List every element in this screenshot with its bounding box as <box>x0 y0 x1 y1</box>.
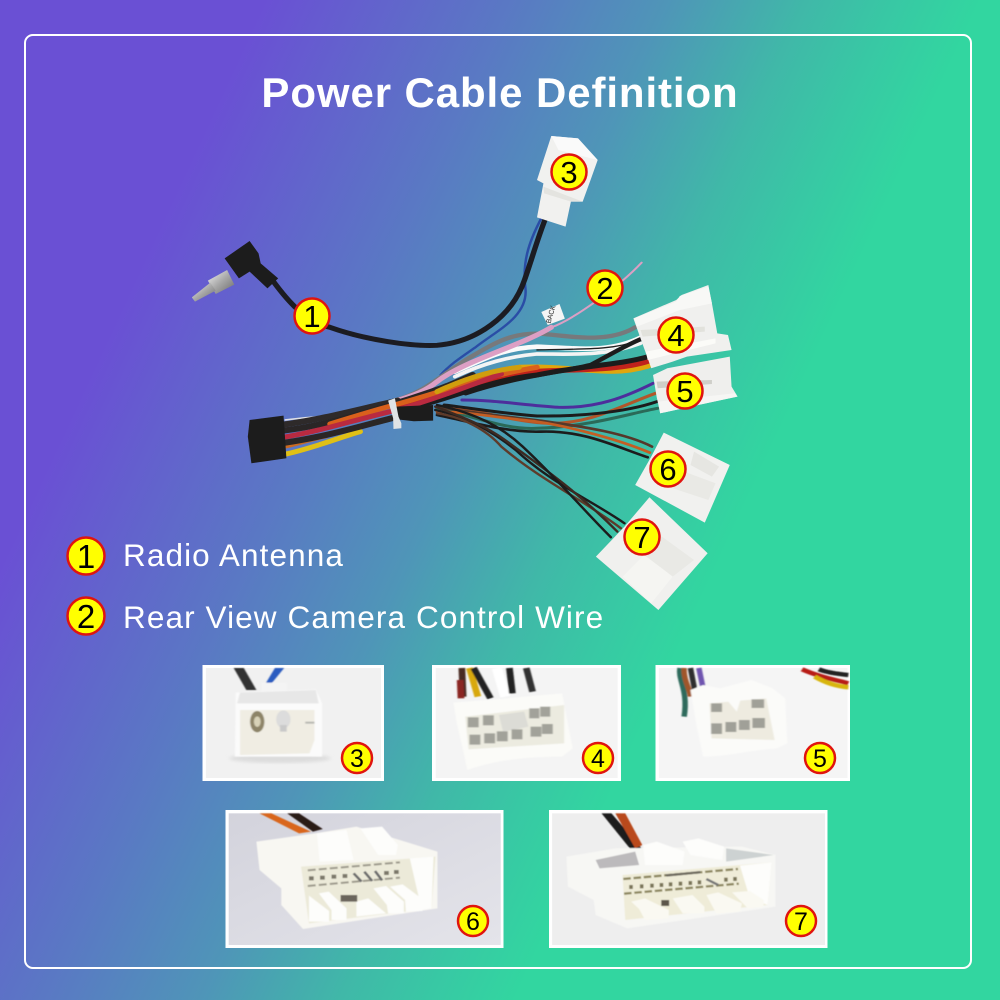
photo badge 4 <box>583 743 613 773</box>
connector 3 body <box>537 136 598 227</box>
photo badge 6: 6 <box>466 908 480 936</box>
wires to connector 4 <box>394 327 648 412</box>
badge 1: 1 <box>303 299 321 334</box>
photo: connector 4 <box>432 665 621 781</box>
badge 5: 5 <box>676 374 694 409</box>
badge 5 <box>668 374 702 409</box>
photo badge 7: 7 <box>794 908 808 936</box>
legend: radio antenna: Radio Antenna <box>123 537 344 573</box>
photo: connector 7 <box>549 810 828 948</box>
photo badge 5: 5 <box>813 745 827 773</box>
photo: connector 6 <box>226 810 504 948</box>
connector 7 body <box>596 497 708 610</box>
connector 6 body <box>635 433 730 523</box>
legend badge 1: 1 <box>77 538 95 575</box>
badge 7: 7 <box>633 520 651 555</box>
badge 2: 2 <box>596 271 614 306</box>
badge 3 <box>552 154 586 190</box>
wiring harness <box>192 136 738 610</box>
photo: connector 5 <box>656 665 850 781</box>
badge 4 <box>658 318 694 353</box>
antenna plug <box>192 241 278 302</box>
badge 6 <box>650 452 686 487</box>
badge 4: 4 <box>667 318 685 353</box>
connector 4 body <box>633 285 732 368</box>
BACK tag: BACK <box>546 305 558 324</box>
wires to connector 5 <box>437 383 658 428</box>
badge 7 <box>624 520 660 555</box>
dark sleeve on trunk <box>396 405 433 421</box>
main trunk of wires <box>283 367 537 454</box>
connector: black ISO plug <box>248 416 286 463</box>
wires to connector 6 <box>437 407 652 457</box>
wire: blue camera lead <box>441 218 541 375</box>
photo badge 6 <box>458 906 488 936</box>
cable tie <box>388 398 401 429</box>
legend badge 2: 2 <box>77 598 95 635</box>
photo badge 4: 4 <box>591 745 605 773</box>
badge 2 <box>588 270 622 306</box>
wires to connector 7 <box>435 405 624 537</box>
BACK tag <box>541 304 565 325</box>
wire: pink camera control <box>551 263 642 327</box>
badge 1 <box>294 298 330 334</box>
badge 6: 6 <box>659 452 677 487</box>
title: Power Cable Definition <box>261 68 739 116</box>
legend badge 2 <box>68 598 104 635</box>
photo badge 7 <box>786 906 816 936</box>
badge 3: 3 <box>560 155 578 190</box>
photo badge 3 <box>342 743 372 773</box>
photo badge 3: 3 <box>350 745 364 773</box>
connector 5 body <box>653 357 738 413</box>
wire: black antenna cable <box>274 217 546 345</box>
legend: rear view camera control wire: Rear View Camera Control Wire <box>123 599 604 635</box>
photo: connector 3 <box>202 665 384 781</box>
legend badge 1 <box>68 538 104 575</box>
photo badge 5 <box>805 743 835 773</box>
